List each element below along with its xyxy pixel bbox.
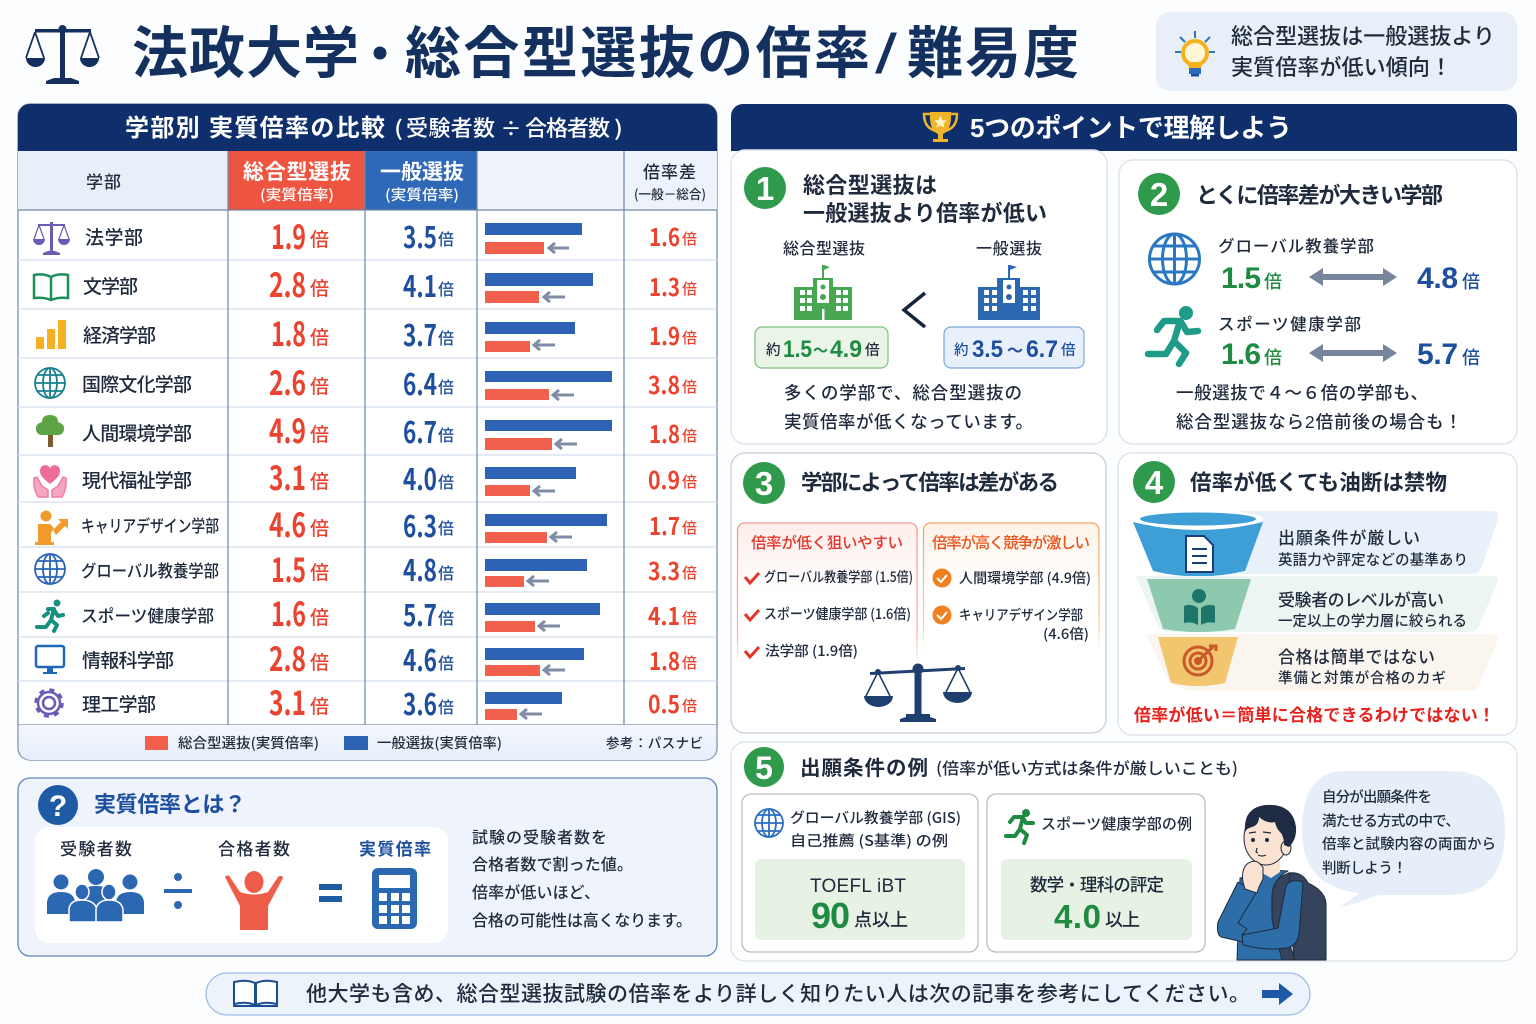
row: 現代福祉学部: 4.0 <box>403 455 437 499</box>
table heading: 受験者数 <box>406 111 495 143</box>
heading band: five points: 5つのポイントで理解しよう <box>970 113 1292 143</box>
table column headers: (実質倍率) <box>385 184 459 205</box>
row: スポーツ健康学部: 4.1 <box>648 597 680 632</box>
heading: 倍率が低くても油断は禁物 <box>1190 470 1447 495</box>
table heading: ÷ <box>500 113 522 143</box>
icon: scales <box>33 222 70 255</box>
heading: とくに倍率差が大きい学部 <box>1196 183 1443 208</box>
row: 国際文化学部 <box>35 357 697 405</box>
row: 現代福祉学部: 倍 <box>682 474 697 491</box>
body text: 一般選抜で４～６倍の学部も、 <box>1176 383 1428 403</box>
row: 経済学部 <box>36 308 697 356</box>
speech bubble: 倍率と試験内容の両面から <box>1322 836 1496 853</box>
less-than sign <box>904 293 925 327</box>
row: 情報科学部: 倍 <box>682 655 697 672</box>
badge 5 <box>744 747 784 787</box>
row: グローバル教養学部: 4.8 <box>403 546 437 590</box>
heading: 一般選抜より倍率が低い <box>803 201 1047 226</box>
row: 文学部 <box>34 259 697 307</box>
row: グローバル教養学部: 倍 <box>438 565 454 583</box>
stat: global: 倍 <box>1462 272 1480 292</box>
row: 現代福祉学部 <box>34 452 697 500</box>
body text: 多くの学部で、総合型選抜の <box>784 383 1022 403</box>
comparison: 一般選抜: 倍 <box>1061 342 1076 359</box>
heading band: five points <box>731 104 1517 151</box>
funnel tier 2: 一定以上の学力層に絞られる <box>1278 613 1467 630</box>
row: 理工学部: 理工学部 <box>82 694 156 716</box>
comparison: 一般選抜: 約 <box>954 342 968 359</box>
funnel tier 2 <box>1136 576 1498 632</box>
row: 人間環境学部: 倍 <box>682 428 697 445</box>
row: 法学部: 3.5 <box>403 213 437 257</box>
row: グローバル教養学部: 倍 <box>310 562 329 584</box>
card: GIS: 点以上 <box>854 910 908 930</box>
funnel tier 2: 受験者のレベルが高い <box>1278 590 1444 610</box>
icon: light bulb <box>1175 31 1215 76</box>
panel: what is the effective ratio <box>18 778 717 956</box>
row: 理工学部: 3.1 <box>269 677 306 725</box>
row: 人間環境学部: 倍 <box>438 427 454 445</box>
icon: question mark: ? <box>49 790 67 823</box>
icon: trophy <box>924 112 957 142</box>
card: GIS <box>742 794 978 952</box>
row: グローバル教養学部 <box>35 544 697 592</box>
stat: sports: 1.6 <box>1221 338 1261 371</box>
title: 総合型選抜の倍率 <box>405 22 870 85</box>
callout: top right summary: 実質倍率が低い傾向！ <box>1231 55 1452 80</box>
stat: sports: 5.7 <box>1417 338 1458 371</box>
funnel tier 1 <box>1133 510 1498 576</box>
heading: 実質倍率とは？ <box>94 792 246 817</box>
row: 経済学部: 倍 <box>682 330 697 347</box>
row: 情報科学部: 1.8 <box>649 642 680 677</box>
table column headers: 一般選抜 <box>380 161 464 184</box>
icon: heart in hands <box>34 465 66 497</box>
table column headers: 学部 <box>86 173 121 192</box>
badge 3: 3 <box>755 465 773 502</box>
row: 人間環境学部: 4.9 <box>269 405 306 453</box>
speech bubble <box>1302 771 1505 907</box>
stat: global: 4.8 <box>1417 262 1458 295</box>
heading <box>800 755 1238 780</box>
row: 理工学部: 倍 <box>310 696 329 718</box>
card: GIS: TOEFL iBT <box>810 876 906 897</box>
row: 人間環境学部 <box>36 405 697 453</box>
row: グローバル教養学部: 倍 <box>682 565 697 582</box>
row: 現代福祉学部: 倍 <box>310 471 329 493</box>
badge 2: 2 <box>1150 176 1168 213</box>
funnel tier 1: 出願条件が厳しい <box>1278 528 1420 548</box>
row: 理工学部: 0.5 <box>648 685 680 720</box>
table legend <box>19 725 716 760</box>
row: 法学部: 法学部 <box>85 227 143 249</box>
row: 経済学部: 1.9 <box>649 317 680 352</box>
row: キャリアデザイン学部: 1.7 <box>649 507 680 542</box>
row: 人間環境学部: 6.7 <box>403 408 437 452</box>
row: 理工学部: 倍 <box>682 698 697 715</box>
speech bubble: 満たせる方式の中で、 <box>1322 813 1460 830</box>
row: 現代福祉学部: 0.9 <box>648 461 680 496</box>
explanation text: 試験の受験者数を <box>472 828 607 847</box>
icon: tilted scales <box>864 664 972 722</box>
list: low ratio: 倍率が低く狙いやすい <box>751 533 903 552</box>
row: スポーツ健康学部: 5.7 <box>403 591 437 635</box>
title <box>132 22 1079 85</box>
card: sports: スポーツ健康学部の例 <box>1041 816 1192 833</box>
icon: globe <box>1150 234 1200 284</box>
stat: sports: 倍 <box>1462 348 1480 368</box>
row: キャリアデザイン学部: 4.6 <box>269 499 306 547</box>
row: 情報科学部: 4.6 <box>403 636 437 680</box>
row: 文学部: 4.1 <box>403 262 437 306</box>
row: グローバル教養学部: 3.3 <box>648 552 680 587</box>
icon: blue globe <box>35 554 65 584</box>
row: 現代福祉学部: 3.1 <box>269 452 306 500</box>
stat: sports: 倍 <box>1264 348 1282 368</box>
row: 経済学部: 1.8 <box>271 308 306 356</box>
stat: sports: スポーツ健康学部 <box>1218 315 1361 334</box>
row: キャリアデザイン学部: 倍 <box>438 520 454 538</box>
row: 文学部: 2.8 <box>269 259 306 307</box>
comparison: 総合型選抜: 約 <box>766 342 780 359</box>
callout: top right summary: 総合型選抜は一般選抜より <box>1231 24 1495 49</box>
stat: global <box>1218 237 1480 295</box>
row: 国際文化学部: 3.8 <box>648 366 680 401</box>
comparison: 総合型選抜: 倍 <box>865 342 880 359</box>
card: sports <box>987 794 1205 952</box>
icon: title scales <box>26 25 99 84</box>
card: sports: 以上 <box>1105 910 1140 930</box>
row: 法学部: 1.9 <box>271 211 306 259</box>
comparison: 一般選抜: 3.5 <box>972 336 1003 363</box>
comparison: 一般選抜: 一般選抜 <box>976 240 1042 258</box>
stat: global: 1.5 <box>1221 262 1261 295</box>
formula box: 実質倍率 <box>359 840 431 859</box>
row: 法学部: 倍 <box>438 231 454 249</box>
comparison: 総合型選抜: 4.9 <box>830 336 862 363</box>
list: high ratio <box>924 523 1099 650</box>
row: キャリアデザイン学部: 6.3 <box>403 502 437 546</box>
icon: globe <box>755 809 783 837</box>
icon: book <box>233 981 278 1006</box>
list: low ratio: グローバル教養学部 (1.5倍) <box>764 567 913 587</box>
icon: runner <box>37 600 63 631</box>
card: sports: 数学・理科の評定 <box>1030 875 1164 895</box>
table column headers: 倍率差 <box>643 163 696 182</box>
row: 法学部 <box>33 211 697 259</box>
row: 法学部: 倍 <box>682 231 697 248</box>
card: GIS: 自己推薦 (S基準) の例 <box>790 830 948 851</box>
panel: point 2 <box>1119 160 1517 444</box>
comparison: 総合型選抜: ～ <box>813 343 828 360</box>
body text: 実質倍率が低くなっています。 <box>784 412 1033 432</box>
heading: 総合型選抜は <box>803 173 937 198</box>
icon: runner <box>1148 306 1198 364</box>
row: スポーツ健康学部: 倍 <box>438 610 454 628</box>
formula box: 合格者数 <box>218 840 290 859</box>
heading <box>803 173 1047 226</box>
funnel <box>1133 510 1498 691</box>
row: スポーツ健康学部: 1.6 <box>271 588 306 636</box>
badge 1 <box>744 167 786 209</box>
row: 国際文化学部: 6.4 <box>403 360 437 404</box>
icon: calculator <box>372 868 417 929</box>
explanation text: 合格者数で割った値。 <box>472 856 633 874</box>
panel: point 5 <box>731 742 1517 961</box>
icon: arrow <box>1262 983 1293 1005</box>
funnel tier 3: 準備と対策が合格のカギ <box>1278 669 1446 687</box>
comparison: 一般選抜: ～ <box>1007 343 1023 360</box>
badge 3 <box>743 462 785 504</box>
list: high ratio: キャリアデザイン学部 <box>959 605 1083 625</box>
row: 経済学部: 倍 <box>310 327 329 349</box>
icon: person with up arrow <box>35 510 68 545</box>
list: low ratio: 法学部 (1.9倍) <box>765 641 858 661</box>
formula box: 受験者数 <box>60 840 132 859</box>
table heading: ( <box>394 113 403 143</box>
funnel tier 3 <box>1146 634 1498 691</box>
comparison: 総合型選抜: 総合型選抜 <box>783 240 865 258</box>
icon: examinees group <box>47 869 144 922</box>
icon: reader <box>1184 589 1215 625</box>
row: スポーツ健康学部: スポーツ健康学部 <box>81 607 214 626</box>
row: キャリアデザイン学部: 倍 <box>310 518 329 540</box>
explanation text: 合格の可能性は高くなります。 <box>472 912 692 930</box>
footer link banner <box>206 973 1310 1015</box>
list: low ratio <box>738 523 917 665</box>
icon: runner <box>1006 809 1033 843</box>
row: 文学部: 倍 <box>310 278 329 300</box>
panel: point 1 <box>731 150 1107 444</box>
panel: point 3 <box>731 453 1106 733</box>
card: sports: 4.0 <box>1054 898 1101 935</box>
panel: faculty comparison table <box>18 104 717 760</box>
icon: blue school <box>978 265 1040 320</box>
table legend: 総合型選抜(実質倍率) <box>178 733 319 753</box>
row: キャリアデザイン学部: キャリアデザイン学部 <box>81 516 219 536</box>
row: 国際文化学部: 国際文化学部 <box>82 374 192 396</box>
icon: tree <box>36 415 64 447</box>
badge 4 <box>1133 461 1175 503</box>
table grid <box>18 151 717 725</box>
icon: document <box>1186 536 1213 572</box>
card: GIS: グローバル教養学部 (GIS) <box>790 807 961 828</box>
row: 国際文化学部: 2.6 <box>269 357 306 405</box>
list: high ratio: (4.6倍) <box>1043 624 1089 644</box>
footer text: 他大学も含め、総合型選抜試験の倍率をより詳しく知りたい人は次の記事を参考にしてください。 <box>306 983 1250 1006</box>
card: GIS: 90 <box>811 895 850 936</box>
row: 国際文化学部: 倍 <box>438 379 454 397</box>
icon: gear <box>36 690 62 716</box>
row: キャリアデザイン学部: 倍 <box>682 520 697 537</box>
callout: top right summary <box>1156 12 1517 91</box>
funnel tier 1: 英語力や評定などの基準あり <box>1278 551 1468 569</box>
row: 経済学部: 3.7 <box>403 311 437 355</box>
icon: teal globe <box>35 368 65 398</box>
row: 文学部: 文学部 <box>83 276 138 298</box>
table heading <box>18 104 717 151</box>
body text <box>1176 383 1462 432</box>
row: 文学部: 倍 <box>682 281 697 298</box>
explanation text <box>472 828 692 930</box>
row: 理工学部: 3.6 <box>403 680 437 724</box>
table column headers: 総合型選抜 <box>243 161 351 184</box>
body text <box>784 383 1033 432</box>
row: 国際文化学部: 倍 <box>310 376 329 398</box>
comparison: 一般選抜 <box>944 240 1084 368</box>
icon: equals sign <box>319 884 342 902</box>
badge 5: 5 <box>755 750 773 786</box>
table column headers: (実質倍率) <box>260 184 334 205</box>
row: スポーツ健康学部 <box>37 588 697 636</box>
list: high ratio: 倍率が高く競争が激しい <box>932 533 1090 552</box>
badge 4: 4 <box>1145 464 1164 501</box>
row: 情報科学部: 倍 <box>438 655 454 673</box>
row: スポーツ健康学部: 倍 <box>682 610 697 627</box>
row: 情報科学部 <box>36 633 697 681</box>
row: 情報科学部: 倍 <box>310 652 329 674</box>
row: 情報科学部: 情報科学部 <box>82 650 174 672</box>
row: 法学部: 倍 <box>310 229 329 251</box>
row: 現代福祉学部: 現代福祉学部 <box>82 470 192 492</box>
heading: 出願条件の例 <box>800 757 928 780</box>
title: 難易度 <box>907 22 1079 85</box>
row: 人間環境学部: 倍 <box>310 424 329 446</box>
row: 経済学部: 経済学部 <box>83 325 156 347</box>
row: 人間環境学部: 人間環境学部 <box>82 423 192 445</box>
comparison: 総合型選抜: 1.5 <box>783 336 812 363</box>
speech bubble: 判断しよう！ <box>1322 860 1407 877</box>
icon: green school <box>794 265 852 320</box>
row: 国際文化学部: 倍 <box>682 379 697 396</box>
row: スポーツ健康学部: 倍 <box>310 607 329 629</box>
badge 1: 1 <box>756 170 774 207</box>
icon: open book <box>34 274 68 300</box>
title: 法政大学 <box>132 22 359 85</box>
icon: question mark <box>38 785 78 825</box>
formula box <box>35 827 448 943</box>
table column headers <box>18 151 717 210</box>
body text: 総合型選抜なら2倍前後の場合も！ <box>1176 412 1462 432</box>
table legend: 一般選抜(実質倍率) <box>377 733 502 753</box>
comparison: 一般選抜: 6.7 <box>1026 336 1058 363</box>
row: 人間環境学部: 1.8 <box>649 415 680 450</box>
heading: (倍率が低い方式は条件が厳しいことも) <box>936 755 1238 779</box>
table legend: 参考：パスナビ <box>606 735 703 751</box>
table column headers: (一般－総合) <box>634 184 706 203</box>
row: 現代福祉学部: 倍 <box>438 474 454 492</box>
row: 法学部: 1.6 <box>649 218 680 253</box>
illustration: student thinking <box>1217 805 1326 960</box>
speech bubble: 自分が出願条件を <box>1322 788 1432 806</box>
comparison: 総合型選抜 <box>755 240 888 368</box>
row: グローバル教養学部: 1.5 <box>271 544 306 592</box>
panel: point 4 <box>1118 453 1517 735</box>
stat: global: グローバル教養学部 <box>1218 237 1374 256</box>
icon: divide sign <box>164 873 192 909</box>
title: / <box>875 22 898 85</box>
warning text: 倍率が低い＝簡単に合格できるわけではない！ <box>1134 705 1495 725</box>
row: 経済学部: 倍 <box>438 330 454 348</box>
row: 情報科学部: 2.8 <box>269 633 306 681</box>
icon: bar chart <box>36 320 66 349</box>
row: 文学部: 倍 <box>438 281 454 299</box>
icon: target <box>1184 646 1216 675</box>
badge 2 <box>1138 173 1180 215</box>
stat: global: 倍 <box>1264 272 1282 292</box>
icon: monitor <box>36 646 64 674</box>
icon: person raising arms <box>225 871 283 930</box>
row: グローバル教養学部: グローバル教養学部 <box>81 562 219 581</box>
table heading: 合格者数 <box>525 111 610 143</box>
list: low ratio: スポーツ健康学部 (1.6倍) <box>764 604 911 624</box>
explanation text: 倍率が低いほど、 <box>472 883 600 902</box>
stat: sports <box>1218 315 1480 371</box>
table heading: 学部別 実質倍率の比較 <box>125 115 385 142</box>
funnel tier 3: 合格は簡単ではない <box>1278 648 1435 667</box>
row: キャリアデザイン学部 <box>35 499 697 547</box>
row: 理工学部 <box>36 677 697 725</box>
row: 理工学部: 倍 <box>438 699 454 717</box>
heading: 学部によって倍率は差がある <box>801 470 1059 495</box>
row: 文学部: 1.3 <box>649 268 680 303</box>
table heading: ) <box>614 113 623 143</box>
list: high ratio: 人間環境学部 (4.9倍) <box>959 568 1091 588</box>
